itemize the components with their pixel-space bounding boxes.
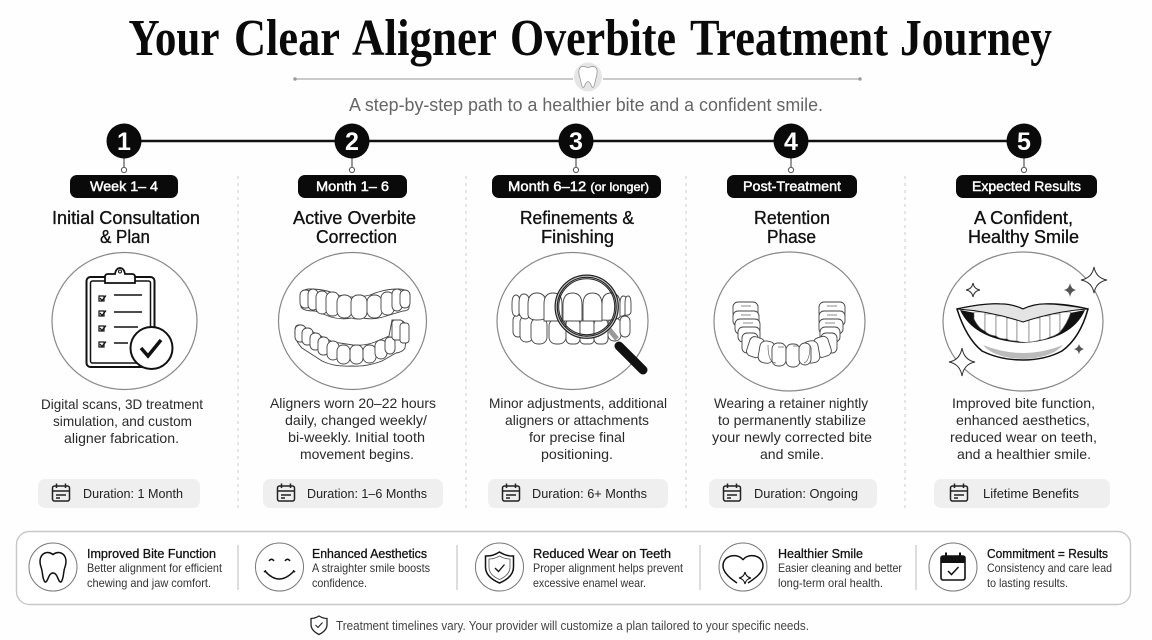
benefit: healthier smile: long-term oral health. <box>778 576 883 590</box>
timeline: 1 <box>117 128 131 156</box>
duration: 1-6 months <box>263 479 443 508</box>
text: step 5 description: and a healthier smile. <box>957 446 1091 462</box>
text: step 2 description <box>270 395 436 462</box>
benefit: commitment equals results: Commitment = Results <box>987 546 1108 561</box>
text: step 2 description: bi-weekly. Initial tooth <box>288 429 425 445</box>
benefit: commitment equals results: Consistency and care lead <box>987 561 1112 575</box>
benefit: improved bite function <box>29 543 223 591</box>
text: step 3 description: aligners or attachments <box>505 412 649 428</box>
lifetime benefits <box>934 479 1110 508</box>
text: step 3 description: for precise final <box>529 429 625 445</box>
pill: month 1-6 <box>298 175 407 198</box>
duration: ongoing: Duration: Ongoing <box>754 486 858 501</box>
panel: benefits <box>16 532 1130 604</box>
text: step 4 description: your newly corrected bite <box>712 429 872 445</box>
duration: 6+ months: Duration: 6+ Months <box>532 486 647 501</box>
benefit: improved bite function: Improved Bite Function <box>87 546 216 561</box>
text: step 4 description: and smile. <box>760 446 824 462</box>
text: step 2 description: Aligners worn 20–22 hours <box>270 395 436 411</box>
icon: teeth under magnifying glass <box>497 252 648 390</box>
title: Aligner <box>352 10 497 67</box>
title: Treatment <box>690 10 889 67</box>
text: step 3 description <box>489 395 667 462</box>
benefit: commitment equals results: to lasting results. <box>987 576 1068 590</box>
pill: week 1-4: Week 1– 4 <box>90 178 158 194</box>
benefit: enhanced aesthetics: A straighter smile boosts <box>312 561 430 575</box>
text: step 1 description: aligner fabrication. <box>64 430 179 446</box>
pill: month 6-12: Month 6–12 (or longer) <box>508 178 649 194</box>
heading: step 3: Finishing <box>541 227 614 247</box>
heading: step 2 <box>293 208 416 247</box>
text: step 2 description: daily, changed weekly/ <box>285 412 427 428</box>
benefit: healthier smile <box>719 543 902 591</box>
title <box>128 10 1052 67</box>
text: step 5 description: reduced wear on teeth, <box>950 429 1097 445</box>
heading: step 5 <box>968 208 1079 247</box>
text: step 1 description: simulation, and custom <box>53 413 192 429</box>
text: step 1 description: Digital scans, 3D treatment <box>41 396 203 412</box>
text: step 4 description: to permanently stabilize <box>718 412 866 428</box>
panel: step 2 <box>263 175 443 508</box>
panel: step 5 <box>934 175 1110 508</box>
benefit: enhanced aesthetics: Enhanced Aesthetics <box>312 546 427 561</box>
title: Your <box>128 10 220 67</box>
text: step 5 description: Improved bite function, <box>952 395 1095 411</box>
duration: 1 month: Duration: 1 Month <box>83 486 183 501</box>
text: step 5 description: enhanced aesthetics, <box>956 412 1090 428</box>
duration: 1 month <box>38 479 200 508</box>
panel: step 3 <box>488 175 668 508</box>
title: Overbite <box>510 10 676 67</box>
heading: step 1 <box>52 208 200 247</box>
benefit: reduced wear on teeth: Proper alignment helps prevent <box>533 561 684 575</box>
heading: step 5: A Confident, <box>974 208 1073 228</box>
heading: step 4 <box>754 208 830 247</box>
pill: post-treatment: Post-Treatment <box>743 178 841 194</box>
timeline <box>106 124 1042 173</box>
heading: step 1: & Plan <box>100 227 150 247</box>
benefit: healthier smile: Easier cleaning and better <box>778 561 902 575</box>
heading: step 4: Retention <box>754 208 830 228</box>
pill: post-treatment <box>727 175 857 198</box>
title: Clear <box>234 10 340 67</box>
text: step 3 description: Minor adjustments, additional <box>489 395 667 411</box>
lifetime benefits: Lifetime Benefits <box>983 486 1079 501</box>
timeline: 4 <box>784 128 798 156</box>
text: step 5 description <box>950 395 1097 462</box>
pill: month 1-6: Month 1– 6 <box>316 178 389 194</box>
duration: 1-6 months: Duration: 1–6 Months <box>307 486 427 501</box>
duration: ongoing <box>709 479 877 508</box>
title: Journey <box>900 10 1052 67</box>
benefit: healthier smile: Healthier Smile <box>778 546 863 561</box>
pill: month 6-12 <box>492 175 661 198</box>
benefit: reduced wear on teeth: excessive enamel wear. <box>533 576 646 590</box>
benefit: commitment equals results <box>929 543 1112 591</box>
benefit: reduced wear on teeth: Reduced Wear on Teeth <box>533 546 671 561</box>
footer note <box>311 616 809 634</box>
pill: expected results <box>956 175 1097 198</box>
panel: step 1 <box>38 175 203 508</box>
panel: step 4 <box>709 175 877 508</box>
heading: step 5: Healthy Smile <box>968 227 1079 247</box>
pill: expected results: Expected Results <box>972 178 1081 194</box>
text: step 3 description: positioning. <box>541 446 613 462</box>
duration: 6+ months <box>488 479 668 508</box>
heading: step 1: Initial Consultation <box>52 208 200 228</box>
icon: clear aligners <box>278 252 426 390</box>
heading: step 4: Phase <box>767 227 816 247</box>
text: step 2 description: movement begins. <box>300 446 414 462</box>
timeline: 2 <box>345 128 359 156</box>
heading: step 3 <box>520 208 634 247</box>
heading: step 2: Correction <box>316 227 397 247</box>
timeline: 5 <box>1017 128 1031 156</box>
icon: smile with sparkles <box>943 252 1107 391</box>
benefit: enhanced aesthetics <box>256 543 430 591</box>
subtitle: A step-by-step path to a healthier bite and a confident smile. <box>349 95 823 115</box>
benefit: enhanced aesthetics: confidence. <box>312 576 367 590</box>
text: step 4 description: Wearing a retainer nightly <box>714 395 868 411</box>
timeline: 3 <box>569 128 583 156</box>
heading: step 2: Active Overbite <box>293 208 416 228</box>
benefit: improved bite function: Better alignment for efficient <box>87 561 223 575</box>
heading: step 3: Refinements & <box>520 208 634 228</box>
icon: clipboard with checkmark <box>52 252 197 390</box>
header divider with tooth icon <box>293 62 862 92</box>
text: step 4 description <box>712 395 872 462</box>
benefit: reduced wear on teeth <box>476 543 684 591</box>
text: step 1 description <box>41 396 203 446</box>
footer note: Treatment timelines vary. Your provider will customize a plan tailored to your specific needs. <box>336 619 809 633</box>
benefit: improved bite function: chewing and jaw comfort. <box>87 576 211 590</box>
pill: week 1-4 <box>70 175 178 198</box>
icon: retainer <box>714 252 865 391</box>
